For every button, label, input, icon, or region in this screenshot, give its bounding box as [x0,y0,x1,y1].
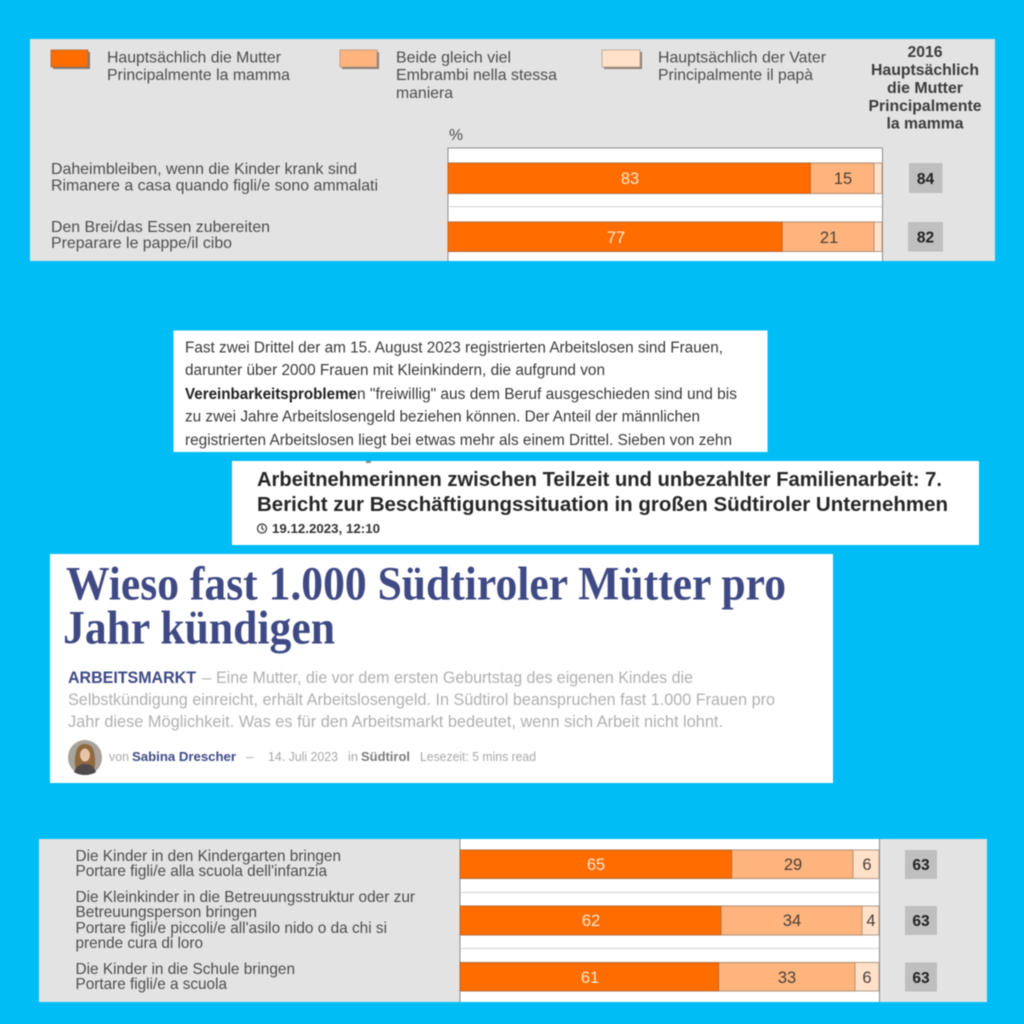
stacked bar chart: 29 [784,856,802,874]
stacked bar chart: 65 [587,856,605,874]
article lead text: ARBEITSMARKT [68,668,197,687]
panel: news article [50,554,833,783]
panel: report headline [232,461,979,545]
stacked bar chart: 83 [621,170,639,188]
row labels: Portare figli/e piccoli/e all'asilo nido o da chi si [76,920,387,937]
stacked bar chart: 77 [607,229,625,247]
stacked bar chart: 61 [581,969,599,987]
article byline: 14. Juli 2023 [268,749,338,764]
legend [51,50,826,102]
2016 values: 63 [912,857,930,874]
article lead text: Jahr diese Möglichkeit. Was es für den Arbeitsmarkt bedeutet, wenn sich Arbeit nicht lohnt. [68,712,723,731]
article byline: – [246,749,254,764]
legend: maniera [396,85,453,102]
column heading: 2016: Hauptsächlich [871,62,979,79]
legend: Principalmente il papà [658,67,813,84]
row labels: Portare figli/e alla scuola dell'infanzia [76,863,327,880]
stacked bar chart: 21 [820,229,838,247]
stacked bar chart [448,148,882,261]
panel: article excerpt: n "freiwillig" aus dem Beruf ausgeschieden sind und bis [357,386,737,403]
row labels: Preparare le pappe/il cibo [51,235,232,252]
article lead text: – [202,668,212,687]
row labels: Portare figli/e a scuola [76,976,227,993]
stacked bar chart: 15 [834,170,852,188]
panel: report headline: Bericht zur Beschäftigungssituation in großen Südtiroler Unternehmen [257,493,948,516]
panel: article excerpt: Fast zwei Drittel der am 15. August 2023 registrierten Arbeitslosen sind Frauen, [185,340,723,356]
legend: Embrambi nella stessa [396,67,557,84]
column heading: 2016: die Mutter [887,80,963,97]
article title: Wieso fast 1.000 Südtiroler Mütter pro [66,558,786,610]
legend: Principalmente la mamma [107,67,290,84]
row labels: Daheimbleiben, wenn die Kinder krank sind [51,161,357,178]
percent axis label: % [449,127,463,144]
article byline: von [109,749,129,764]
stacked bar chart [460,839,880,1002]
article byline: in [348,749,358,764]
legend: Hauptsächlich der Vater [658,50,826,66]
article title [63,558,786,654]
2016 values [908,163,943,252]
column heading: 2016: la mamma [886,116,964,132]
stacked bar chart: 34 [783,912,801,930]
icon: author avatar [68,740,102,775]
article lead text: Selbstkündigung einreicht, erhält Arbeitslosengeld. In Südtirol beanspruchen fast 1.000 Frauen pro [68,690,775,709]
2016 values [905,850,937,992]
column heading: 2016 [868,44,982,132]
article byline [109,749,536,764]
2016 values: 84 [917,171,934,188]
stacked bar chart: 4 [866,912,876,930]
row labels: prende cura di loro [76,935,203,952]
row labels: Die Kinder in den Kindergarten bringen [76,848,341,865]
row labels: Rimanere a casa quando figli/e sono ammalati [51,178,378,194]
article title: Jahr kündigen [63,602,335,654]
panel: article excerpt: zu zwei Jahre Arbeitslosengeld beziehen können. Der Anteil der männlichen [185,408,700,426]
column heading: 2016: Principalmente [868,98,982,115]
icon: clock [258,524,266,533]
article lead text: Eine Mutter, die vor dem ersten Geburtstag des eigenen Kindes die [216,668,693,687]
row labels [51,161,378,252]
column heading: 2016: 2016 [908,44,943,61]
panel: report headline: 19.12.2023, 12:10 [272,521,380,536]
panel: top chart [30,39,995,261]
panel: article excerpt: darunter über 2000 Frauen mit Kleinkindern, die aufgrund von [185,362,605,379]
row labels: Den Brei/das Essen zubereiten [51,219,270,236]
2016 values: 63 [912,970,930,987]
2016 values: 82 [917,230,934,246]
panel: bottom chart [39,839,987,1002]
panel: report headline: Arbeitnehmerinnen zwischen Teilzeit und unbezahlter Familienarbeit: 7. [257,468,942,491]
panel: article excerpt: registrierten Arbeitslosen liegt bei etwas mehr als einem Drittel. Sieben von zehn [185,432,732,449]
stacked bar chart: 62 [582,912,600,930]
panel: article excerpt: Vereinbarkeitsprobleme [185,386,357,403]
row labels [76,848,415,993]
legend: Hauptsächlich die Mutter [107,50,281,66]
2016 values: 63 [912,913,930,930]
stacked bar chart: 33 [778,969,796,987]
row labels: Die Kleinkinder in die Betreuungsstruktur oder zur [76,889,415,906]
row labels: Die Kinder in die Schule bringen [76,961,295,978]
row labels: Betreuungsperson bringen [76,904,257,921]
article lead text [68,668,775,731]
panel: article excerpt [174,330,768,452]
stacked bar chart: 6 [862,969,872,987]
stacked bar chart: 6 [862,856,872,874]
article byline: Sabina Drescher [132,749,236,764]
legend: Beide gleich viel [396,50,511,66]
article byline: Lesezeit: 5 mins read [420,749,536,764]
article byline: Südtirol [361,749,410,764]
